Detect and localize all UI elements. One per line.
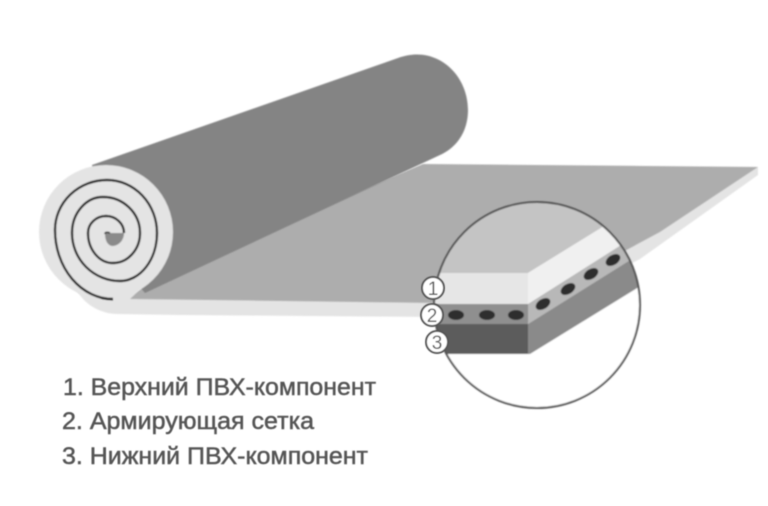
badge 1: 1	[428, 279, 438, 300]
infographic: PVC membrane roll	[38, 54, 758, 465]
legend	[62, 374, 376, 470]
roll body	[92, 54, 468, 293]
layers cross-section	[434, 202, 638, 355]
mesh dots front	[448, 252, 622, 320]
roll	[39, 54, 468, 299]
layer 1 side	[528, 228, 620, 303]
layer 3 side	[526, 260, 638, 355]
badge 3: 3	[432, 333, 442, 354]
badge 3	[426, 331, 448, 354]
layer 2 front	[420, 304, 528, 324]
top surface	[440, 202, 603, 274]
sheet surface	[130, 164, 758, 303]
spiral line	[55, 180, 157, 299]
magnifier ring	[434, 202, 640, 408]
legend item 2: 2. Армирующая сетка	[62, 408, 314, 435]
badge 2	[421, 304, 443, 327]
roll end cap	[39, 165, 173, 299]
spiral hook	[105, 232, 110, 234]
layer 1 front	[434, 272, 528, 304]
spiral centre	[105, 233, 124, 246]
layer 3 front	[420, 324, 528, 354]
magnifier	[432, 200, 642, 410]
badge 1	[422, 277, 444, 300]
legend item 1: 1. Верхний ПВХ-компонент	[63, 374, 376, 401]
layer 2 side	[527, 245, 630, 324]
sheet edge	[70, 167, 758, 317]
badge 2: 2	[427, 306, 437, 327]
legend item 3: 3. Нижний ПВХ-компонент	[62, 443, 368, 470]
membrane sheet	[70, 164, 758, 317]
magnifier white fill	[434, 202, 640, 408]
